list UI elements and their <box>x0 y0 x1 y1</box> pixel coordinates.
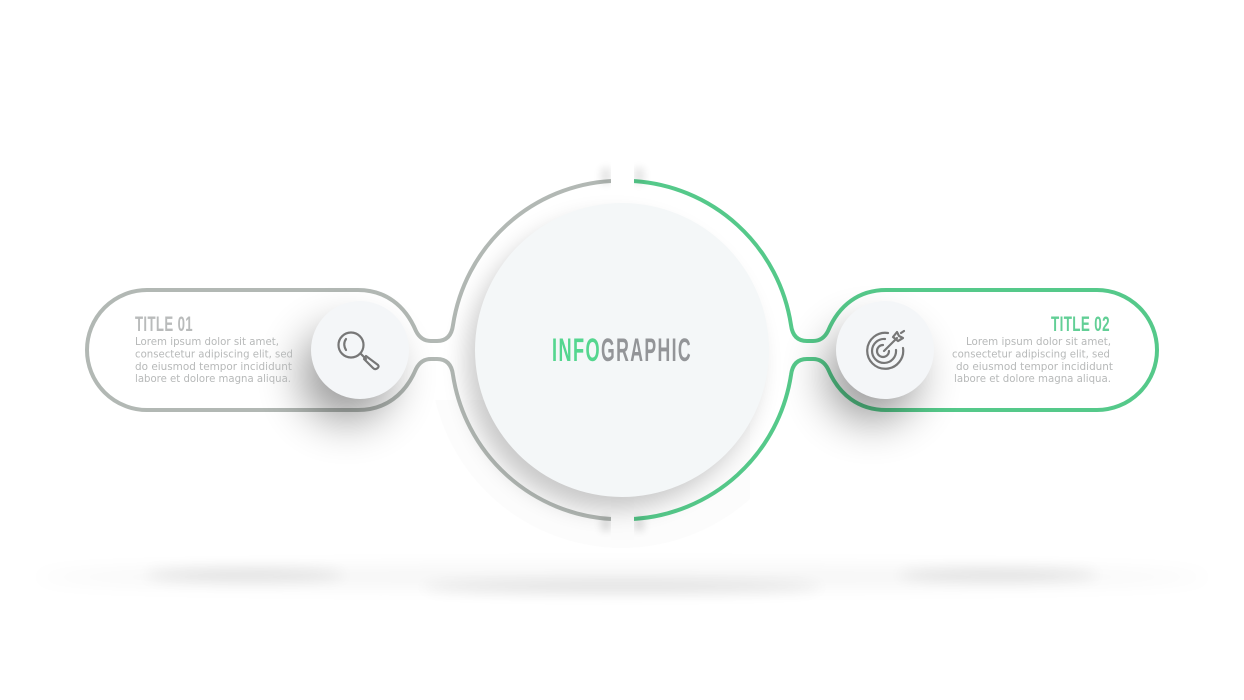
text block: title 02: Lorem ipsum dolor sit amet, <box>966 336 1111 348</box>
small circle left <box>311 301 409 399</box>
small circle shadow right <box>826 329 918 421</box>
text block: title 01: Lorem ipsum dolor sit amet, <box>135 336 279 348</box>
icon: magnifying glass <box>338 332 379 369</box>
panel: title 02 green outline <box>633 181 1157 519</box>
heading: infographic: GRAPHIC <box>601 332 692 368</box>
text block: title 02: consectetur adipiscing elit, sed <box>952 348 1110 360</box>
text block: title 01: consectetur adipiscing elit, sed <box>135 348 293 360</box>
ground shadows <box>32 567 1212 593</box>
faint halo below central ring <box>430 164 814 548</box>
text block: title 01: labore et dolore magna aliqua. <box>135 373 291 385</box>
central circle <box>475 203 769 497</box>
heading: infographic: INFO <box>552 332 601 368</box>
text block: title 01 <box>135 313 293 385</box>
central circle shadow <box>466 218 758 510</box>
infographic canvas <box>85 167 1159 596</box>
gap shadows <box>601 158 644 540</box>
text block: title 02: TITLE 02 <box>1051 313 1110 336</box>
text block: title 01: TITLE 01 <box>135 313 193 336</box>
text block: title 01: do eiusmod tempor incididunt <box>135 361 292 373</box>
text block: title 02: labore et dolore magna aliqua. <box>954 373 1111 385</box>
heading: infographic <box>552 332 692 368</box>
text block: title 02 <box>952 313 1113 385</box>
icon: target with arrow <box>867 331 904 369</box>
text block: title 02: do eiusmod tempor incididunt <box>956 361 1113 373</box>
panel: title 01 gray outline <box>87 181 611 519</box>
small circle shadow left <box>301 329 393 421</box>
small circle right <box>836 301 934 399</box>
